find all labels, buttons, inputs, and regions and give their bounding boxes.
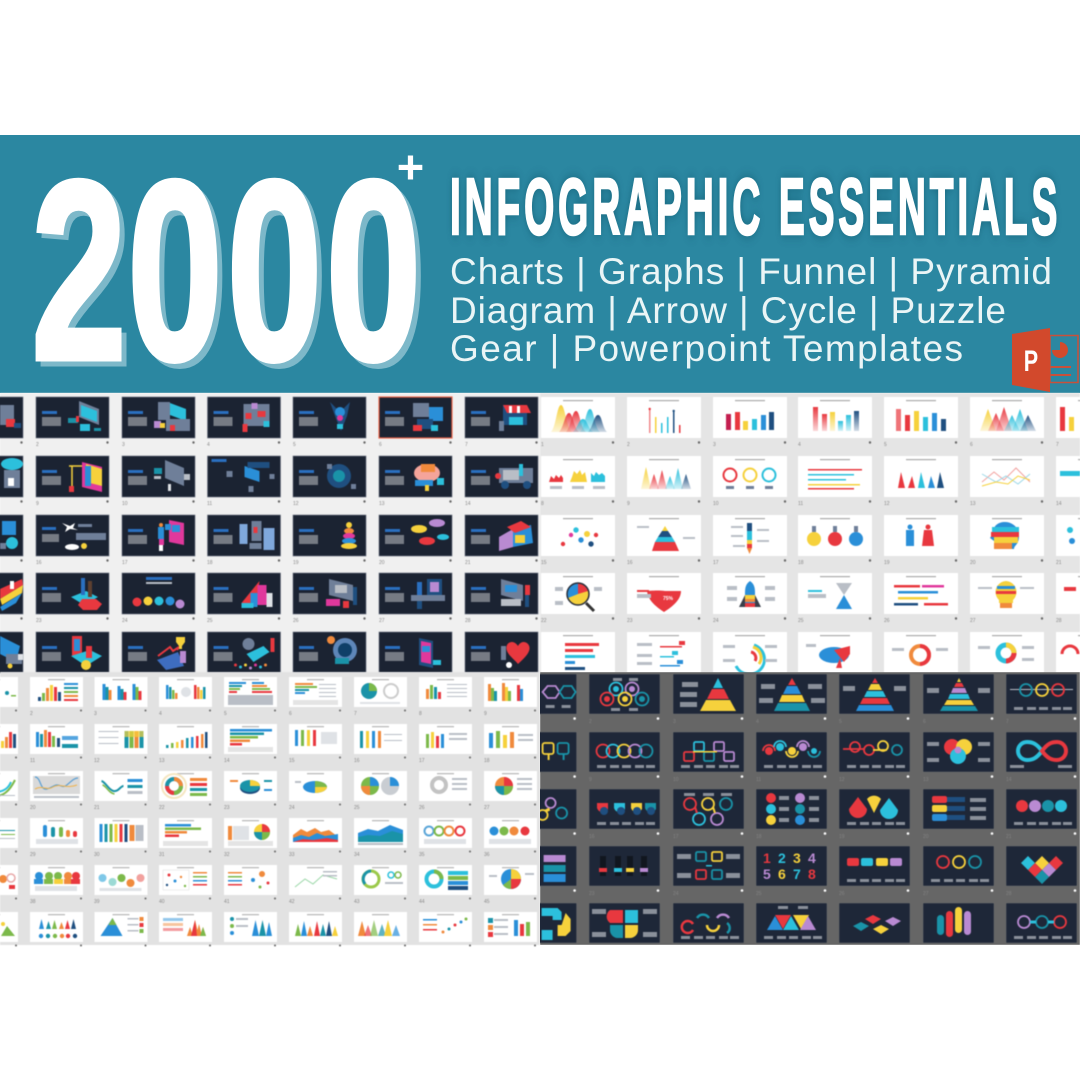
- slide numbers: 11: [30, 758, 35, 764]
- row of chart slides 2: [541, 456, 1080, 503]
- slide numbers: 9: [484, 711, 487, 717]
- slide numbers: 22: [541, 618, 547, 624]
- heading: INFOGRAPHIC ESSENTIALS: [450, 163, 1061, 252]
- slide numbers: 25: [798, 618, 804, 624]
- slide numbers: 6: [923, 719, 926, 725]
- slide numbers: 5: [293, 442, 296, 448]
- slide numbers: [36, 442, 471, 624]
- row of slides 1: [0, 397, 538, 444]
- row of diagram slides 4: 5: [763, 866, 771, 882]
- row of slides 2: [0, 456, 538, 503]
- panel: light chart slides: [540, 393, 1080, 679]
- slide numbers: [30, 711, 490, 905]
- slide numbers: 17: [122, 560, 128, 566]
- slide numbers: 40: [159, 899, 165, 905]
- heading: INFOGRAPHIC ESSENTIALS: [450, 163, 1061, 252]
- slide numbers: 21: [465, 560, 471, 566]
- slide numbers: 4: [207, 442, 210, 448]
- row of diagram slides 4: 1: [763, 850, 771, 866]
- slide numbers: 16: [354, 758, 360, 764]
- slide numbers: 38: [30, 899, 36, 905]
- slide numbers: 17: [713, 560, 719, 566]
- row of slides 5: [0, 632, 538, 679]
- slide numbers: 16: [589, 834, 595, 840]
- slide numbers: 4: [756, 719, 759, 725]
- slide numbers: 7: [465, 442, 468, 448]
- slide numbers: 8: [419, 711, 422, 717]
- slide numbers: 20: [923, 834, 929, 840]
- slide numbers: 7: [1006, 719, 1009, 725]
- row of diagram slides 4: 3: [793, 850, 801, 866]
- slide numbers: 20: [379, 560, 385, 566]
- slide numbers: 33: [289, 852, 295, 858]
- slide numbers: 2: [30, 711, 33, 717]
- slide numbers: 3: [94, 711, 97, 717]
- big number 2000+: 0: [127, 129, 223, 414]
- slide numbers: 27: [923, 891, 929, 897]
- slide numbers: 11: [756, 777, 761, 783]
- slide numbers: 42: [289, 899, 295, 905]
- big number 2000+: +: [397, 140, 424, 193]
- row of diagram slides 4: 8: [808, 866, 816, 882]
- slide numbers: 7: [354, 711, 357, 717]
- row of chart slides 4: [541, 573, 1080, 620]
- slide numbers: 15: [541, 560, 547, 566]
- big number 2000+: 0: [232, 134, 327, 419]
- slide numbers: 20: [970, 560, 976, 566]
- row of diagram slides 4: 7: [793, 866, 801, 882]
- slide numbers: 18: [484, 758, 490, 764]
- slide numbers: 5: [884, 442, 887, 448]
- slide numbers: 27: [970, 618, 976, 624]
- slide numbers: 24: [122, 618, 128, 624]
- big number 2000+: 0: [331, 134, 426, 419]
- slide numbers: 6: [970, 442, 973, 448]
- slide numbers: 8: [541, 501, 544, 507]
- slide numbers: 12: [839, 777, 845, 783]
- slide numbers: 14: [465, 501, 471, 507]
- row of chart slides 4: 75%: [663, 596, 674, 602]
- slide numbers: 1: [541, 442, 544, 448]
- big number 2000+: [31, 129, 426, 419]
- slide numbers: 44: [419, 899, 425, 905]
- slide numbers: 45: [484, 899, 490, 905]
- slide numbers: 25: [354, 805, 360, 811]
- slide numbers: 3: [122, 442, 125, 448]
- slide numbers: 14: [1056, 501, 1062, 507]
- slide numbers: [589, 719, 1012, 897]
- slide numbers: 9: [589, 777, 592, 783]
- slide numbers: 29: [30, 852, 36, 858]
- slide numbers: 13: [379, 501, 385, 507]
- row of small slides 1: [0, 677, 537, 712]
- slide numbers: 28: [1006, 891, 1012, 897]
- slide numbers: 12: [884, 501, 890, 507]
- slide numbers: 20: [30, 805, 36, 811]
- slide numbers: 31: [159, 852, 165, 858]
- slide numbers: 18: [207, 560, 213, 566]
- slide numbers: 5: [839, 719, 842, 725]
- slide numbers: 24: [289, 805, 295, 811]
- row of slides 3: [0, 515, 538, 562]
- slide numbers: 26: [419, 805, 425, 811]
- subtitle lines: [450, 251, 1052, 369]
- slide numbers: 15: [289, 758, 295, 764]
- slide numbers: 6: [379, 442, 382, 448]
- slide numbers: 24: [713, 618, 719, 624]
- slide numbers: 14: [224, 758, 230, 764]
- teal banner: [0, 129, 1080, 419]
- slide numbers: 28: [465, 618, 471, 624]
- slide numbers: 27: [379, 618, 385, 624]
- slide numbers: 32: [224, 852, 230, 858]
- row of small slides 4: [0, 818, 537, 852]
- slide numbers: 35: [419, 852, 425, 858]
- slide numbers: 16: [627, 560, 633, 566]
- slide numbers: 23: [224, 805, 230, 811]
- slide numbers: 21: [1006, 834, 1012, 840]
- subtitle lines: Diagram | Arrow | Cycle | Puzzle: [450, 290, 1006, 331]
- row of diagram slides 4: 6: [778, 866, 786, 882]
- slide numbers: 30: [94, 852, 100, 858]
- big number 2000+: 0: [132, 134, 228, 419]
- row of diagram slides 4: [506, 846, 1077, 892]
- slide numbers: 13: [970, 501, 976, 507]
- slide numbers: 23: [36, 618, 42, 624]
- row of diagram slides 1: [506, 674, 1077, 720]
- slide numbers: 9: [36, 501, 39, 507]
- panel: dark isometric slides: [0, 393, 540, 679]
- slide numbers: 13: [159, 758, 165, 764]
- slide numbers: 6: [289, 711, 292, 717]
- slide numbers: 17: [419, 758, 425, 764]
- slide numbers: 3: [713, 442, 716, 448]
- row of small slides 5: [0, 865, 537, 900]
- row of diagram slides 3: [506, 789, 1077, 835]
- row of small slides 3: [0, 771, 537, 806]
- slide numbers: 27: [484, 805, 490, 811]
- slide numbers: 4: [798, 442, 801, 448]
- row of chart slides 5: [541, 632, 1080, 679]
- slide numbers: 7: [1056, 442, 1059, 448]
- slide numbers: 3: [673, 719, 676, 725]
- panel: dark diagram slides: [506, 672, 1080, 949]
- slide numbers: 23: [627, 618, 633, 624]
- slide numbers: 12: [94, 758, 100, 764]
- slide numbers: 19: [884, 560, 890, 566]
- slide numbers: 39: [94, 899, 100, 905]
- subtitle lines: Gear | Powerpoint Templates: [450, 328, 963, 369]
- panel: multicolour chart slides: [0, 672, 540, 946]
- row of small slides 2: [0, 724, 537, 758]
- slide numbers: 21: [1056, 560, 1062, 566]
- big number 2000+: 2: [36, 134, 132, 419]
- row of diagram slides 2: [506, 732, 1077, 778]
- big number 2000+: 0: [227, 129, 322, 414]
- slide numbers: 2: [36, 442, 39, 448]
- slide numbers: 11: [798, 501, 803, 507]
- slide numbers: [541, 442, 1062, 624]
- big number 2000+: 2: [31, 129, 127, 414]
- slide numbers: 4: [159, 711, 162, 717]
- slide numbers: 26: [293, 618, 299, 624]
- slide numbers: 9: [627, 501, 630, 507]
- slide numbers: 43: [354, 899, 360, 905]
- row of slides 4: [0, 573, 538, 620]
- slide numbers: 10: [713, 501, 719, 507]
- slide numbers: 26: [884, 618, 890, 624]
- slide numbers: 22: [159, 805, 165, 811]
- slide numbers: 24: [673, 891, 679, 897]
- slide numbers: 41: [224, 899, 230, 905]
- slide numbers: 34: [354, 852, 360, 858]
- row of chart slides 3: [541, 515, 1080, 562]
- icon: PowerPoint logo: P: [1024, 343, 1038, 378]
- slide numbers: 14: [1006, 777, 1012, 783]
- slide numbers: 19: [293, 560, 299, 566]
- slide numbers: 5: [224, 711, 227, 717]
- icon: PowerPoint logo: [1012, 328, 1078, 392]
- slide numbers: 2: [589, 719, 592, 725]
- subtitle lines: Charts | Graphs | Funnel | Pyramid: [450, 251, 1052, 292]
- row of diagram slides 5: [540, 902, 1078, 944]
- slide numbers: 25: [756, 891, 762, 897]
- slide numbers: 13: [923, 777, 929, 783]
- slide numbers: 25: [207, 618, 213, 624]
- slide numbers: 21: [94, 805, 100, 811]
- slide numbers: 2: [627, 442, 630, 448]
- big number 2000+: 0: [326, 129, 421, 414]
- slide numbers: 11: [207, 501, 212, 507]
- slide numbers: 19: [839, 834, 845, 840]
- slide numbers: 28: [1056, 618, 1062, 624]
- slide numbers: 12: [293, 501, 299, 507]
- slide numbers: 10: [122, 501, 128, 507]
- row of chart slides 1: [541, 397, 1080, 444]
- row of small slides 6: [0, 912, 537, 946]
- slide numbers: 17: [673, 834, 679, 840]
- slide numbers: 10: [673, 777, 679, 783]
- slide numbers: 26: [839, 891, 845, 897]
- slide numbers: 23: [589, 891, 595, 897]
- row of diagram slides 4: 2: [778, 850, 786, 866]
- row of diagram slides 4: 4: [808, 850, 816, 866]
- slide numbers: 18: [798, 560, 804, 566]
- slide numbers: 16: [36, 560, 42, 566]
- slide numbers: 36: [484, 852, 490, 858]
- slide numbers: 18: [756, 834, 762, 840]
